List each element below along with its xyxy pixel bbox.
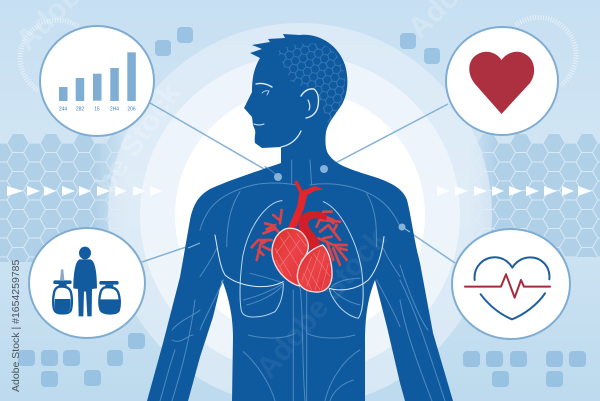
faint watermark background: Stock <box>452 54 533 135</box>
faint watermark background: be Stock <box>89 77 188 199</box>
bar chart <box>59 52 136 101</box>
arm vein lines <box>160 265 445 401</box>
neck and torso vein lines <box>200 160 400 401</box>
vertical stock id text: Adobe Stock | #1654259785 <box>10 260 22 392</box>
panel: heartbeat circle <box>452 229 570 339</box>
human body figure <box>147 34 453 401</box>
bar labels: 2H4 <box>110 106 119 112</box>
hair cell texture <box>278 44 345 123</box>
heart and vessels <box>252 181 347 292</box>
hexagon pattern left <box>0 134 128 262</box>
watermark: faint text over body: Adobe Stock <box>250 223 393 384</box>
panel: patient and bags circle <box>29 228 145 338</box>
face details <box>254 83 318 147</box>
decorative tick arc left <box>20 20 78 90</box>
bar labels: 206 <box>127 106 136 112</box>
faint watermark background <box>10 0 533 199</box>
panel: bar chart circle <box>40 26 154 136</box>
arrows row right <box>437 186 592 196</box>
bar labels: 15 <box>94 106 100 112</box>
icon: person with bags <box>53 247 120 316</box>
aorta <box>287 181 323 229</box>
bar labels: 282 <box>76 106 84 112</box>
hexagon pattern right <box>470 134 600 257</box>
arrows row left <box>7 186 163 196</box>
decorative tick arc right <box>516 17 576 85</box>
icon: red heart <box>469 52 534 114</box>
left ventricle <box>272 228 308 286</box>
concentric rings <box>108 23 492 401</box>
right ventricle <box>297 245 332 292</box>
connector dots <box>274 165 406 230</box>
connector lines outside body <box>142 103 455 263</box>
lung outlines <box>215 201 384 318</box>
bar labels <box>59 106 136 112</box>
bar labels: 244 <box>59 106 67 112</box>
icon: heart outline with pulse <box>465 257 550 319</box>
pulmonary branches <box>252 210 347 265</box>
heart muscle lines <box>275 232 330 290</box>
panel: heart circle <box>446 27 558 135</box>
connector lines inside body <box>188 227 410 248</box>
